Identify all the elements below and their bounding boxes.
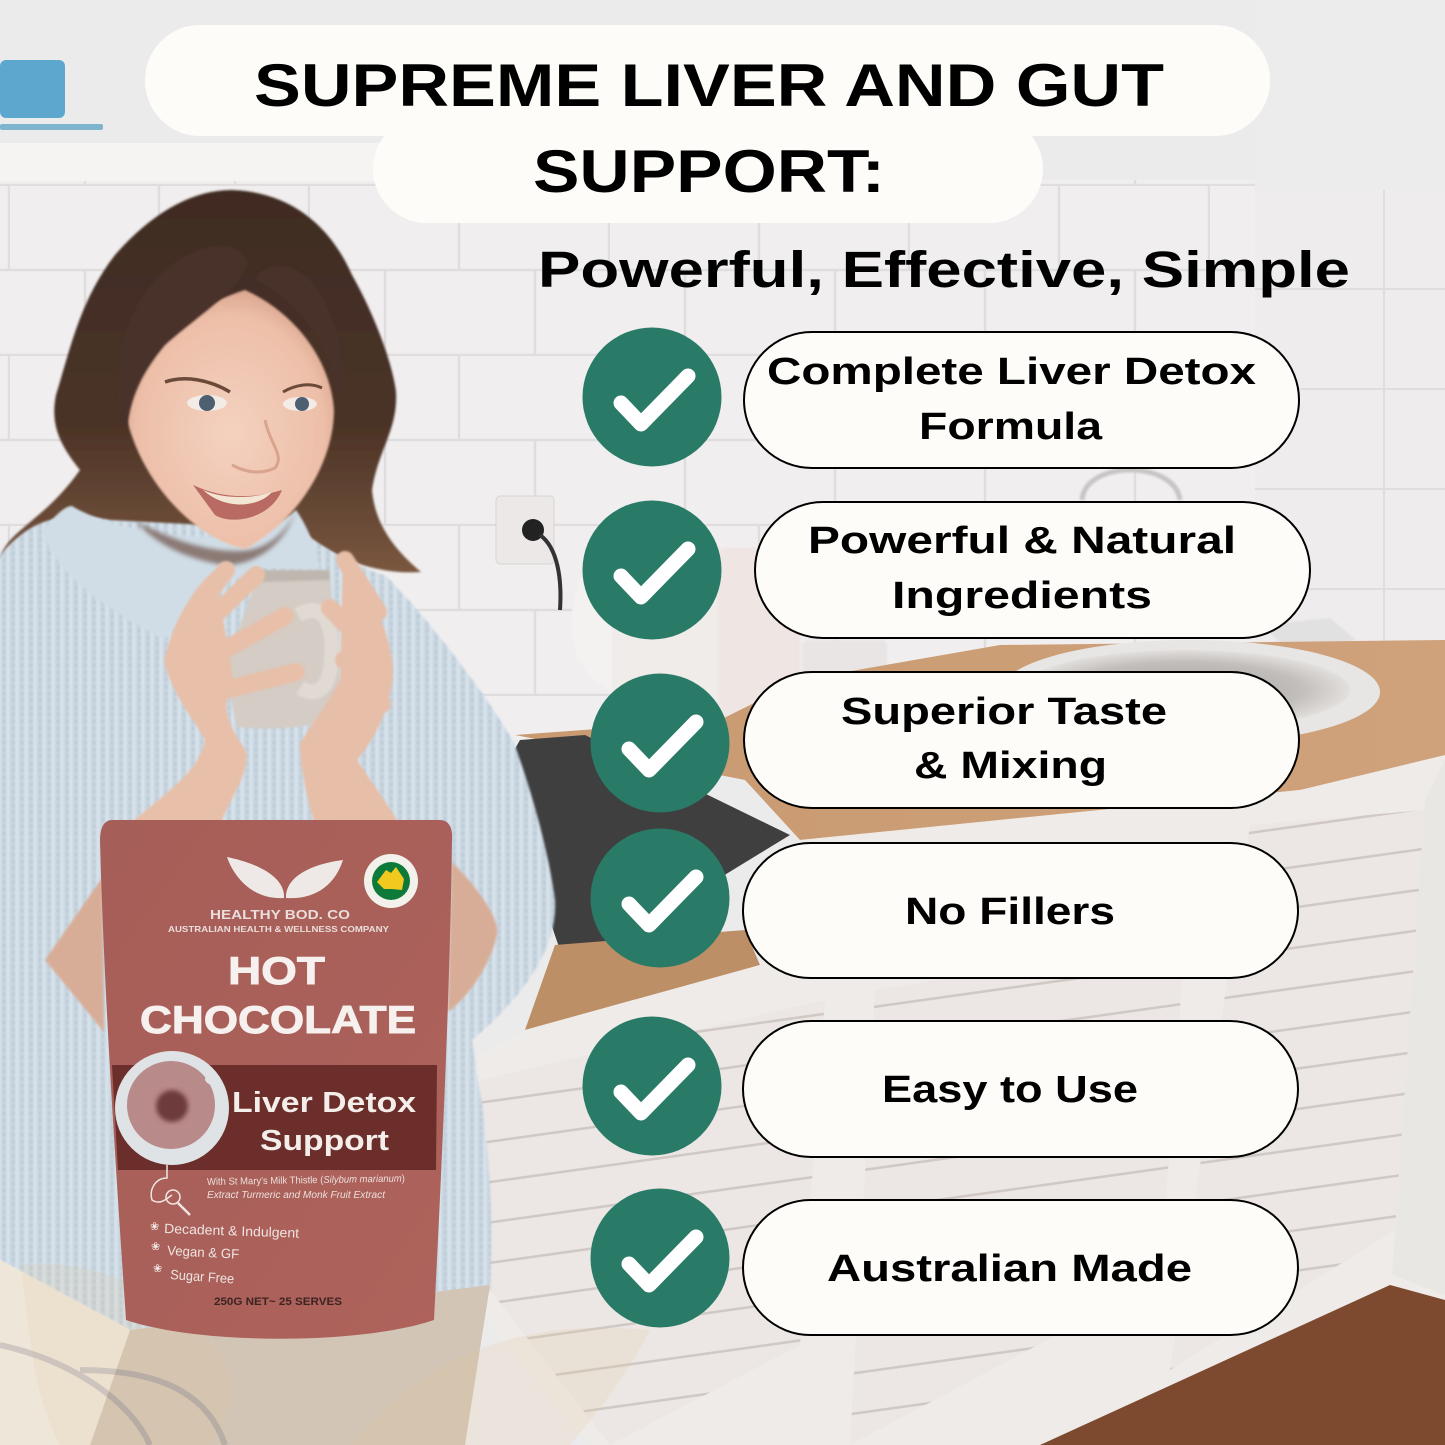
- product name: [140, 950, 416, 1042]
- dark hob: [500, 735, 790, 950]
- pill: [755, 502, 1310, 638]
- forearms behind pouch: [45, 862, 497, 1032]
- benefit row: powerful and natural ingredients: [582, 500, 1310, 640]
- check icon: [582, 328, 722, 466]
- cream top hem: [0, 1260, 130, 1445]
- cup of hot chocolate: [115, 1051, 229, 1165]
- woman holding mug: [0, 190, 555, 1445]
- curtain: [1392, 760, 1445, 1295]
- title banner: [145, 25, 1270, 223]
- check icon: [590, 1188, 730, 1328]
- pill: [744, 332, 1299, 468]
- feature bullets: ❀: [150, 1221, 159, 1233]
- wall shelf: [0, 143, 380, 181]
- pill: [744, 672, 1299, 808]
- pill: & Mixing: [914, 745, 1107, 787]
- benefit row: easy to use: [582, 1016, 1298, 1157]
- neck shadow: [135, 510, 296, 565]
- liver detox label: Liver Detox: [232, 1087, 416, 1119]
- benefit row: no fillers: [590, 828, 1298, 978]
- wooden counter: [515, 640, 1445, 840]
- leaf logo: [227, 857, 343, 898]
- product pouch: [100, 820, 452, 1339]
- benefit row: superior taste and mixing: [590, 672, 1299, 812]
- pill: Powerful & Natural: [808, 520, 1236, 562]
- wooden floor: [1040, 1285, 1445, 1445]
- sink: [1000, 640, 1380, 744]
- liver detox label: [232, 1087, 416, 1157]
- feature bullets: [150, 1221, 300, 1286]
- pill: Australian Made: [827, 1248, 1192, 1290]
- check icon: [590, 674, 730, 812]
- sweater body: [0, 516, 555, 1330]
- brand tagline: AUSTRALIAN HEALTH & WELLNESS COMPANY: [168, 924, 389, 934]
- liver icon: [151, 1165, 190, 1215]
- feature bullets: Vegan & GF: [167, 1243, 240, 1262]
- Australian made badge: [364, 854, 418, 908]
- check icon: [582, 500, 722, 640]
- face: [127, 290, 334, 549]
- faint logo watermark: [0, 1264, 650, 1445]
- brand name: HEALTHY BOD. CO: [210, 908, 350, 922]
- feature bullets: Sugar Free: [170, 1267, 235, 1286]
- wall socket and plug: [496, 496, 560, 610]
- pill: Superior Taste: [841, 691, 1167, 733]
- ingredient line: With St Mary's Milk Thistle (Silybum marianum): [207, 1174, 405, 1188]
- check icon: [590, 828, 730, 968]
- benefit row: complete liver detox formula: [582, 328, 1299, 468]
- pouch body: [100, 820, 452, 1339]
- ingredient line: Extract Turmeric and Monk Fruit Extract: [207, 1190, 386, 1201]
- pill: Complete Liver Detox: [767, 351, 1256, 393]
- pill: Formula: [919, 406, 1103, 448]
- turtleneck collar: [42, 506, 320, 640]
- pill: [743, 1200, 1298, 1335]
- title line two: SUPPORT:: [533, 138, 885, 205]
- right hand: [300, 560, 398, 822]
- nose and smile: [193, 420, 282, 520]
- benefit row: australian made: [590, 1188, 1298, 1335]
- check icon: [582, 1016, 722, 1156]
- white cabinets: [470, 755, 1445, 1445]
- pill: Ingredients: [892, 575, 1152, 617]
- ingredient line: [207, 1174, 405, 1201]
- pill: [743, 843, 1298, 978]
- eyes and brows: [165, 379, 322, 411]
- feature bullets: ❀: [151, 1241, 160, 1253]
- mug: [224, 570, 343, 729]
- net weight: 250G NET~ 25 SERVES: [214, 1296, 342, 1308]
- pill: Easy to Use: [882, 1069, 1138, 1111]
- dark band: [112, 1065, 437, 1170]
- liver detox label: Support: [260, 1125, 389, 1157]
- pants: [90, 1285, 490, 1445]
- pill: [743, 1021, 1298, 1157]
- title line one: SUPREME LIVER AND GUT: [254, 52, 1164, 119]
- feature bullets: Decadent & Indulgent: [164, 1221, 300, 1241]
- side fringe: [117, 246, 343, 430]
- product name: CHOCOLATE: [140, 999, 416, 1042]
- left hand: [132, 570, 296, 822]
- blue mug: [0, 60, 103, 130]
- pill: No Fillers: [905, 891, 1115, 933]
- hair: [0, 190, 421, 572]
- subtitle: Powerful, Effective, Simple: [538, 241, 1350, 298]
- kettle and paper towels: [571, 470, 1356, 720]
- product name: HOT: [228, 950, 325, 993]
- feature bullets: ❀: [153, 1263, 162, 1275]
